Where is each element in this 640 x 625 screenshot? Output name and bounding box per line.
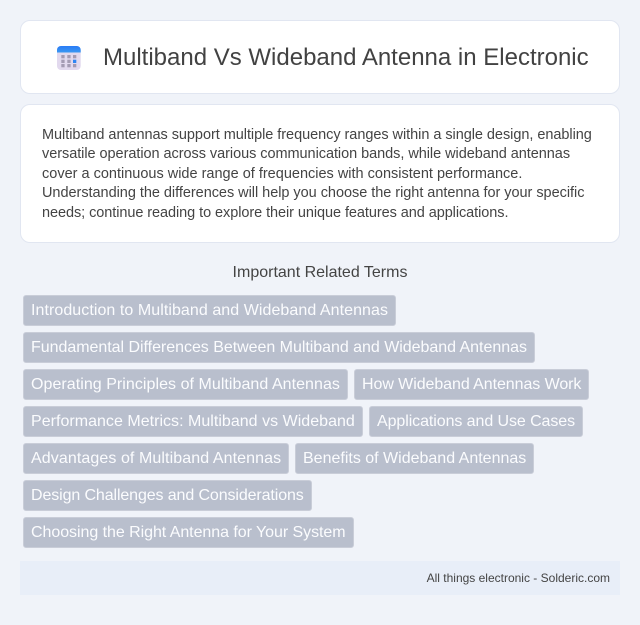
icon: calendar grid [57, 46, 81, 70]
tag [369, 406, 583, 437]
tag: How Wideband Antennas Work [362, 376, 581, 393]
intro text: needs; continue reading to explore their unique features and applications. [42, 204, 508, 220]
tag: Fundamental Differences Between Multiband and Wideband Antennas [31, 339, 527, 356]
intro text [42, 126, 592, 220]
intro text: Multiband antennas support multiple frequency ranges within a single design, enabling [42, 126, 592, 142]
tag [23, 406, 363, 437]
tag [23, 332, 535, 363]
title: Multiband Vs Wideband Antenna in Electronic [103, 44, 589, 71]
tag: Introduction to Multiband and Wideband Antennas [31, 302, 388, 319]
tag [354, 369, 589, 400]
intro text: Understanding the differences will help you choose the right antenna for your specific [42, 185, 584, 201]
tag [23, 517, 354, 548]
header card [20, 20, 620, 94]
tag list [23, 295, 589, 548]
tag [23, 443, 289, 474]
tag: Operating Principles of Multiband Antennas [31, 376, 340, 393]
footer bar [20, 561, 620, 595]
tag: Applications and Use Cases [377, 413, 575, 430]
intro paragraph card [20, 104, 620, 243]
related terms heading: Important Related Terms [233, 264, 407, 281]
tag: Advantages of Multiband Antennas [31, 450, 281, 467]
footer credit: All things electronic - Solderic.com [427, 571, 610, 585]
intro text: cover a continuous wide range of frequencies with consistent performance. [42, 166, 522, 182]
tag: Design Challenges and Considerations [31, 487, 304, 504]
tag [23, 369, 348, 400]
intro text: versatile operation across various communication bands, while wideband antennas [42, 146, 570, 162]
tag: Performance Metrics: Multiband vs Wideband [31, 413, 355, 430]
tag [23, 480, 312, 511]
tag [295, 443, 534, 474]
tag: Choosing the Right Antenna for Your System [31, 524, 346, 541]
tag [23, 295, 396, 326]
tag: Benefits of Wideband Antennas [303, 450, 526, 467]
